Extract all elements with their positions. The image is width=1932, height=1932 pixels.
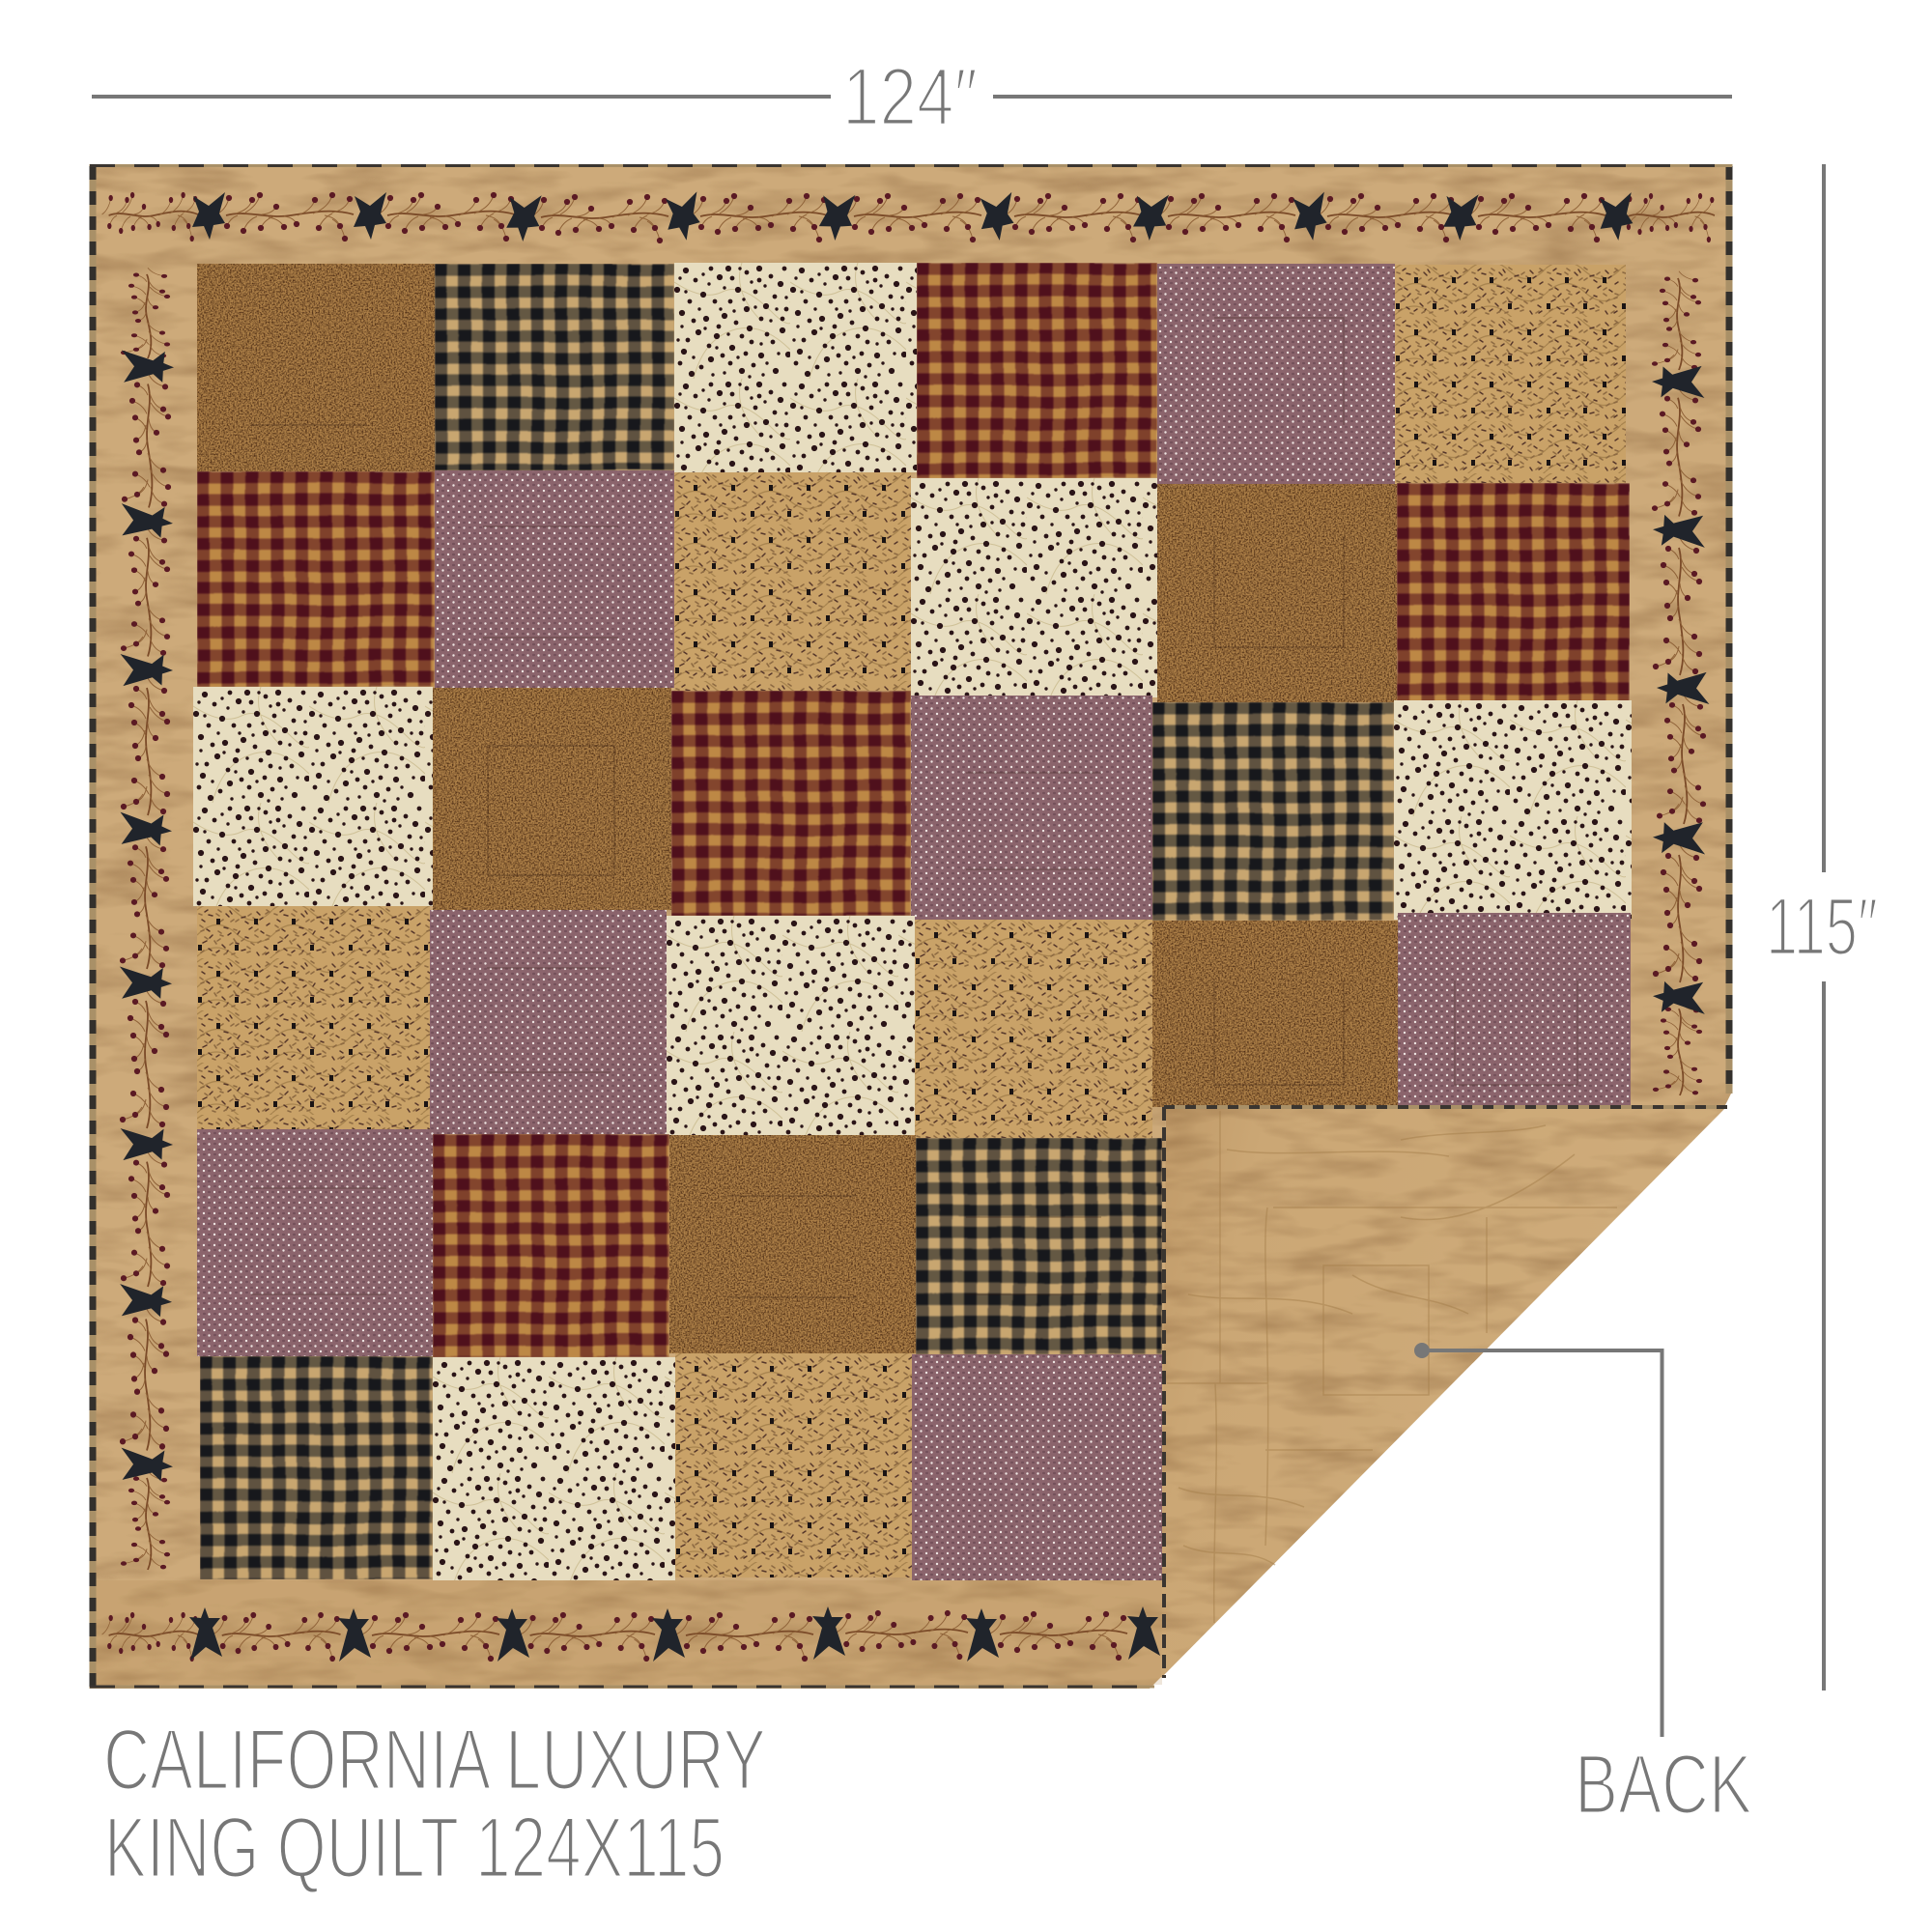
patch: cream dots r3c1 [193, 687, 433, 906]
width dimension: 124 inches [92, 51, 1732, 142]
patch: brown tone r3c2 [433, 688, 671, 910]
patch: red check r2c6 [1397, 483, 1630, 702]
patch: tan floral r4c1 [197, 906, 430, 1129]
left border vine with stars [118, 268, 175, 1570]
back fabric [1161, 1108, 1725, 1678]
patch: red check r1c4 [917, 263, 1157, 478]
bottom border shading [94, 1580, 1162, 1685]
callout: back: BACK [1575, 1738, 1752, 1832]
patch: cream dots r1c3 [674, 263, 917, 472]
patch: purple dots r6c4 [912, 1354, 1162, 1580]
patch: tan floral r1c6 [1395, 265, 1626, 483]
patch: cream dots r6c2 [433, 1357, 675, 1580]
patch: purple dots r4c2 [430, 910, 667, 1134]
callout: back [1414, 1343, 1752, 1832]
patch: brown tone r1c1 [197, 264, 435, 471]
patch: purple dots r3c4 [911, 696, 1152, 920]
quilting stitch lines [251, 318, 1577, 1297]
patch: red check r3c3 [671, 691, 911, 916]
patch: cream dots r4c3 [667, 916, 915, 1135]
patch: brown tone r2c5 [1157, 484, 1397, 702]
patch: brown tone r5c3 [669, 1135, 916, 1353]
patch: brown tone r4c5 [1152, 921, 1398, 1107]
patch: purple dots r2c2 [435, 470, 674, 688]
product title: KING QUILT 124X115 [104, 1799, 724, 1895]
patch: tan floral r6c3 [675, 1353, 912, 1577]
patch: purple dots r1c5 [1157, 264, 1395, 484]
check binding edges [90, 164, 1732, 1689]
width dimension: 124 inches: 124″ [842, 51, 978, 142]
patch: cream dots r2c4 [911, 478, 1157, 697]
patch: purple dots r5c1 [197, 1129, 433, 1356]
height dimension: 115 inches [1766, 164, 1878, 1690]
patch: black check r5c4 [916, 1138, 1162, 1354]
patch: black check r3c5 [1152, 702, 1394, 921]
fold binding top dashes [1164, 1105, 1727, 1109]
patch: red check r5c2 [433, 1134, 669, 1357]
patch: tan floral r2c3 [674, 472, 911, 691]
patch: red check r2c1 [197, 471, 435, 687]
patch: tan floral r4c4 [915, 920, 1152, 1138]
height dimension: 115 inches: 115″ [1766, 881, 1878, 972]
right border vine with stars [1651, 271, 1711, 1095]
patch: purple dots r4c6 [1398, 913, 1631, 1107]
folded quilt back [1161, 1107, 1727, 1678]
product title: CALIFORNIA LUXURY [103, 1711, 766, 1807]
fold binding left [1162, 1107, 1166, 1678]
quilt front [90, 164, 1732, 1689]
back stitching and wrinkles [1167, 1111, 1617, 1623]
patch: black check r6c1 [200, 1356, 433, 1579]
bottom border vine with stars [102, 1606, 1160, 1662]
fold binding top [1164, 1105, 1727, 1109]
patch: cream dots r3c6 [1394, 700, 1632, 920]
top border vine with stars [102, 191, 1715, 242]
border fabric [90, 164, 1732, 1689]
product title [103, 1711, 766, 1895]
patch: black check r1c2 [435, 264, 674, 470]
